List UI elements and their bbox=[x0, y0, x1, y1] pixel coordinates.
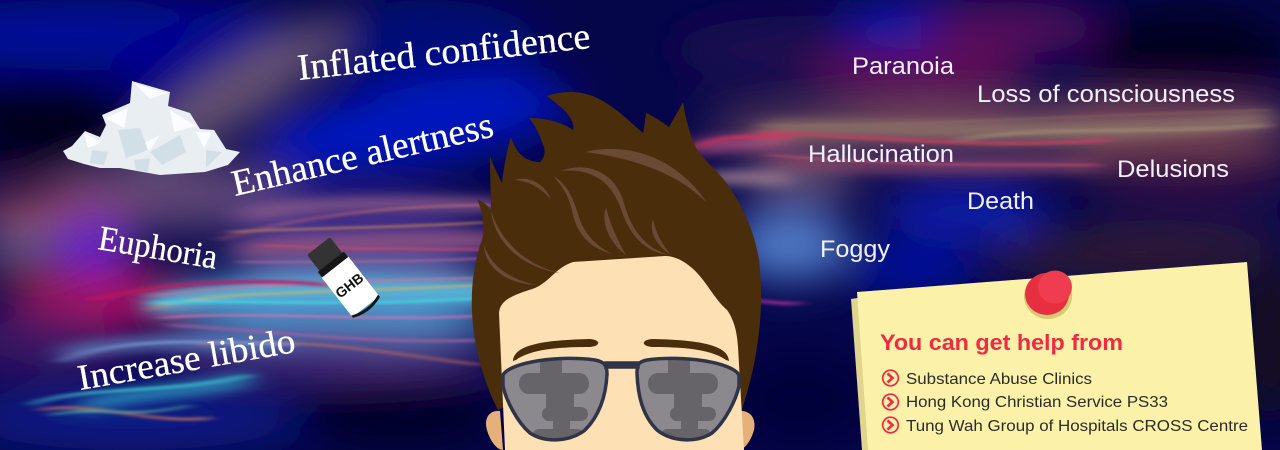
camouflage patch left bbox=[519, 360, 589, 438]
text: Death: Death bbox=[967, 188, 1034, 215]
note shadow bbox=[851, 296, 880, 450]
text: Foggy: Foggy bbox=[820, 236, 890, 263]
text: Paranoia: Paranoia bbox=[852, 53, 955, 80]
glasses frame bbox=[503, 358, 739, 440]
list item 2: Hong Kong Christian Service PS33 bbox=[906, 394, 1168, 411]
icon: crystal pile bbox=[63, 81, 240, 175]
left lens bbox=[503, 358, 607, 440]
hair highlights bbox=[484, 149, 707, 285]
text: Inflated confidence: Inflated confidence bbox=[295, 16, 592, 89]
icon: GHB bottle: GHB bbox=[332, 270, 366, 301]
right ear bbox=[738, 411, 754, 450]
list item 3: Tung Wah Group of Hospitals CROSS Centre bbox=[906, 418, 1248, 435]
face bbox=[499, 256, 744, 450]
left ear bbox=[486, 411, 503, 450]
sunglasses bbox=[503, 350, 739, 443]
text: Increase libido: Increase libido bbox=[74, 320, 298, 398]
text: Delusions: Delusions bbox=[1117, 156, 1229, 183]
character head bbox=[472, 92, 761, 450]
camouflage patch right bbox=[648, 360, 718, 438]
right lens bbox=[637, 358, 739, 440]
note paper bbox=[857, 262, 1262, 450]
left eyebrow bbox=[513, 339, 598, 361]
pin bbox=[1024, 270, 1072, 319]
text: Hallucination: Hallucination bbox=[808, 141, 954, 168]
icon: GHB bottle bbox=[305, 236, 382, 321]
text: Enhance alertness: Enhance alertness bbox=[228, 105, 497, 205]
note heading: You can get help from bbox=[880, 330, 1123, 355]
hair bbox=[472, 92, 761, 410]
text: Euphoria: Euphoria bbox=[96, 218, 221, 277]
right eyebrow bbox=[644, 339, 729, 361]
text: Loss of consciousness: Loss of consciousness bbox=[977, 81, 1235, 108]
list item 1: Substance Abuse Clinics bbox=[906, 371, 1092, 388]
sticky note bbox=[851, 262, 1262, 450]
